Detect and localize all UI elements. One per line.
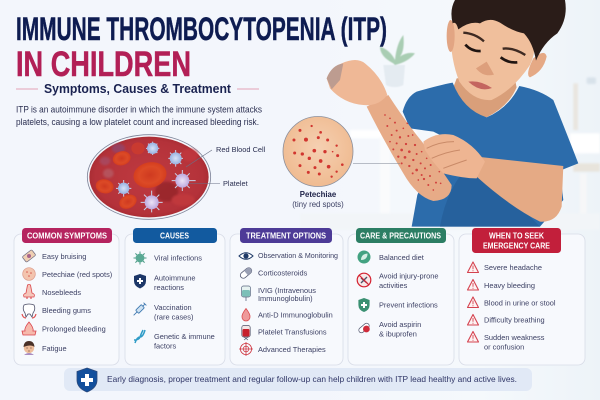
blood cell illustration: [87, 135, 211, 219]
subtitle: Symptoms, Causes & Treatment: [44, 82, 232, 96]
nose: [476, 62, 494, 75]
red blood cells: [94, 142, 169, 212]
platelet label: [188, 179, 248, 188]
heading: CAUSES: [160, 230, 189, 240]
panel: common symptoms: [14, 228, 119, 365]
icon: tired face: [24, 341, 34, 355]
text: Viral infections: [154, 254, 202, 262]
text: Anti-D Immunoglobulin: [258, 310, 333, 320]
icon: target: [239, 342, 253, 356]
finger lines: [427, 142, 467, 168]
knuckle shadow: [327, 63, 343, 89]
left ear: [447, 20, 455, 52]
text: Avoid injury-prone: [379, 272, 438, 280]
text: IVIG (Intravenous: [258, 286, 316, 295]
text: Prolonged bleeding: [42, 324, 106, 334]
icon: warning: [468, 314, 478, 325]
heading: WHEN TO SEEK: [489, 230, 544, 240]
red blood cell label: Red Blood Cell: [216, 145, 266, 154]
icon: blood bag: [242, 326, 250, 340]
plant in background: [380, 35, 415, 87]
right ear: [528, 53, 547, 77]
icon: shield: [134, 274, 146, 288]
icon: syringe: [132, 302, 147, 317]
eyebrows: [463, 33, 525, 55]
text: Autoimmune: [154, 274, 196, 282]
panel: care and precautions: [348, 228, 454, 365]
icon: tooth: [22, 304, 36, 318]
icon: warning: [468, 280, 478, 290]
heading: CARE & PRECAUTIONS: [360, 230, 441, 240]
text: Blood in urine or stool: [484, 298, 556, 308]
text: factors: [154, 342, 176, 350]
hair: [451, 0, 566, 61]
panel: when to seek emergency care: [459, 228, 585, 365]
text: Bleeding gums: [42, 306, 91, 315]
text: Vaccination: [154, 303, 192, 312]
text: Prevent infections: [379, 300, 438, 310]
text: Observation & Monitoring: [258, 251, 338, 260]
heading: TREATMENT OPTIONS: [246, 230, 326, 240]
title line 1: IMMUNE THROMBOCYTOPENIA (ITP): [16, 11, 387, 47]
text: activities: [379, 281, 408, 290]
icon: DNA: [134, 330, 145, 343]
icon: green shield: [358, 298, 370, 312]
platelet label: Platelet: [223, 179, 248, 188]
title line 2: IN CHILDREN: [16, 44, 191, 84]
heading: [472, 228, 561, 253]
icon: warning: [468, 332, 478, 342]
text: Genetic & immune: [154, 332, 215, 341]
shirt shading: [440, 160, 540, 227]
heading: EMERGENCY CARE: [483, 240, 550, 250]
petechiae caption: Petechiae: [300, 190, 336, 199]
text: or confusion: [484, 342, 524, 352]
raised hand: [327, 60, 387, 105]
icon: eye: [239, 253, 253, 259]
petechiae caption: (tiny red spots): [292, 200, 344, 209]
text: Heavy bleeding: [484, 281, 535, 290]
platelets: [116, 142, 196, 212]
title: [16, 11, 387, 84]
icon: drop: [242, 308, 250, 321]
text: Corticosteroids: [258, 268, 308, 278]
raised forearm: [367, 95, 452, 201]
icon: warning: [468, 297, 478, 308]
panel: treatment options: [230, 228, 343, 365]
text: Platelet Transfusions: [258, 328, 327, 336]
message: Early diagnosis, proper treatment and regular follow-up can help children with ITP lead healthy and active lives.: [107, 375, 517, 384]
petechiae magnifier: [283, 116, 400, 186]
icon: medical shield: [77, 368, 97, 392]
text: & ibuprofen: [379, 330, 417, 338]
panel: causes: [125, 228, 225, 365]
heading: COMMON SYMPTOMS: [27, 230, 107, 240]
text: Fatigue: [42, 344, 67, 353]
mouth: [468, 81, 492, 89]
icon: capsule: [239, 267, 253, 279]
text: (rare cases): [154, 312, 193, 322]
boy photo illustration: [327, 0, 578, 227]
icon: leaf: [358, 250, 370, 264]
icon: pills: [358, 322, 370, 334]
text: Petechiae (red spots): [42, 270, 112, 279]
icon: no injury: [357, 273, 371, 287]
icon: nose: [24, 284, 34, 299]
scratching hand: [423, 134, 485, 178]
text: Nosebleeds: [42, 288, 81, 297]
icon: bruise plaster: [22, 250, 36, 262]
intro text: platelets, causing a low platelet count and increased bleeding risk.: [16, 117, 259, 127]
red spots: [292, 125, 344, 178]
scratching forearm: [477, 157, 563, 222]
icon: blood drop on skin: [22, 322, 36, 335]
petechiae on arm: [384, 114, 441, 191]
text: reactions: [154, 283, 184, 292]
icon: IV bag: [242, 286, 250, 301]
eyes: [465, 45, 517, 62]
text: Sudden weakness: [484, 333, 544, 342]
text: Severe headache: [484, 263, 542, 272]
text: Avoid aspirin: [379, 320, 421, 329]
icon: virus: [134, 252, 146, 264]
intro text: [16, 104, 262, 127]
text: Easy bruising: [42, 252, 86, 261]
t-shirt: [403, 83, 578, 227]
text: Difficulty breathing: [484, 316, 545, 324]
text: Balanced diet: [379, 253, 424, 262]
head: [450, 10, 535, 100]
text: Immunoglobulin): [258, 294, 313, 303]
blurred room backdrop: [300, 77, 600, 230]
footer banner: [64, 368, 532, 392]
text: Advanced Therapies: [258, 345, 326, 354]
icon: warning: [468, 262, 478, 272]
red blood cell label: [186, 145, 266, 167]
icon: petechiae: [23, 268, 35, 280]
intro text: ITP is an autoimmune disorder in which the immune system attacks: [16, 104, 262, 114]
neck: [453, 72, 517, 117]
